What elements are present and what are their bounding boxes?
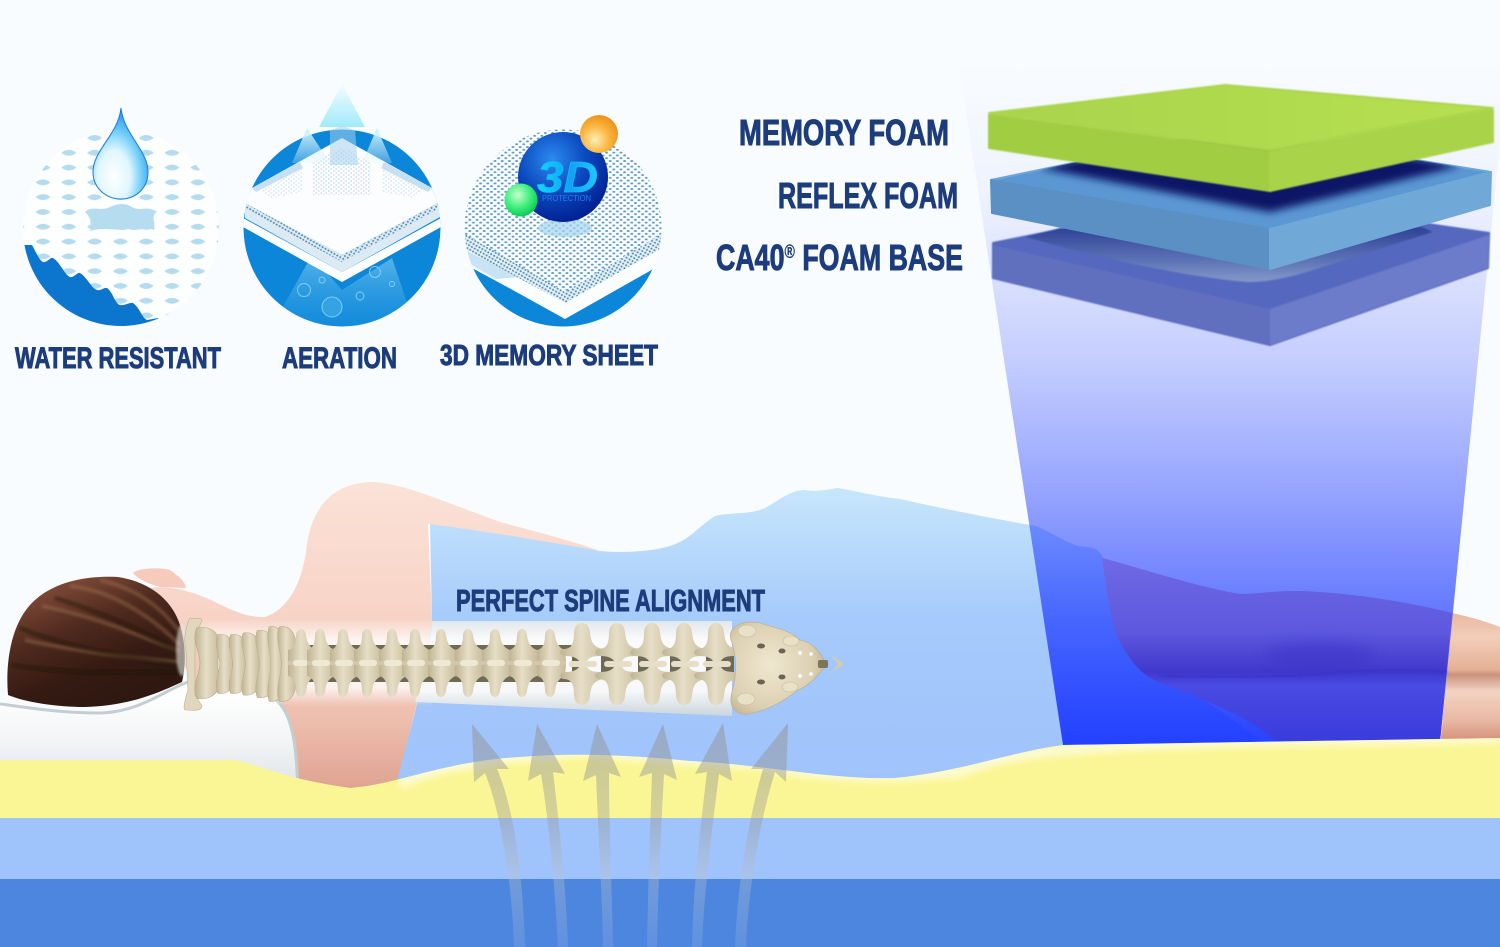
- spine: sacrum and coccyx: [730, 622, 844, 714]
- white lower band: [243, 218, 441, 282]
- foam layer: reflex: [991, 125, 1491, 269]
- foam layer: CA40 base: [993, 195, 1489, 345]
- protection lettering: PROTECTION: [542, 194, 591, 203]
- green sphere: [504, 184, 538, 216]
- arrow 6: [735, 723, 788, 947]
- layer shadow band: [1025, 227, 1433, 282]
- figure: skin torso, neck and arm: [150, 482, 600, 800]
- figure: hair: [7, 577, 188, 707]
- figure: leg skin: [1440, 613, 1500, 750]
- label: CA40 foam base: CA40: [716, 237, 808, 278]
- orange sphere: [580, 115, 618, 153]
- spine background glow: [200, 618, 732, 716]
- icon: water resistant: [20, 108, 219, 340]
- label: aeration: AERATION: [282, 342, 397, 375]
- sphere shadow: [538, 219, 592, 237]
- spine: dark canal pieces: [274, 645, 734, 682]
- blue wave: [24, 245, 158, 326]
- mattress: comfort layer (yellow): [0, 738, 1500, 818]
- arrow 1: [472, 724, 525, 947]
- sheet top: [245, 138, 438, 255]
- mattress: middle layer: [0, 818, 1500, 879]
- spine illustration: [184, 618, 844, 714]
- label: reflex foam: REFLEX FOAM: [778, 175, 958, 216]
- icon: 3D memory sheet: [464, 115, 662, 326]
- icon: aeration: [243, 84, 441, 326]
- label: CA40 foam base: FOAM BASE: [795, 237, 963, 278]
- lower light rays: [283, 255, 407, 326]
- label: perfect spine alignment: PERFECT SPINE ALIGNMENT: [456, 583, 765, 618]
- spine: thoracic vertebrae: [288, 629, 566, 697]
- label: CA40 foam base: ®: [784, 242, 795, 263]
- spine: lumbar vertebrae: [560, 623, 741, 705]
- arrow 2: [528, 724, 568, 947]
- water reflection: [85, 204, 157, 231]
- label: 3D memory sheet: 3D MEMORY SHEET: [440, 340, 658, 372]
- figure: shorts inside beam: [1102, 558, 1452, 742]
- blue 3D sphere: [518, 132, 608, 222]
- 3D lettering: 3D: [537, 153, 598, 202]
- spine: cervical vertebrae: [184, 618, 296, 710]
- layered edge: [245, 203, 440, 272]
- label: water resistant: WATER RESISTANT: [15, 342, 221, 375]
- figure: pillow: [0, 682, 298, 800]
- figure: shirt: [390, 488, 1275, 800]
- arrows: air circulation: [472, 723, 788, 947]
- arrow 5: [692, 723, 732, 947]
- figure: ear: [133, 568, 186, 588]
- label: memory foam: MEMORY FOAM: [739, 112, 949, 153]
- arrow 3: [583, 724, 621, 947]
- water drop: [93, 108, 148, 199]
- air triangles: [292, 84, 392, 165]
- mattress: base layer: [0, 879, 1500, 947]
- arrow 4: [639, 724, 677, 947]
- foam layer: memory: [989, 85, 1493, 191]
- light beam from foam layers: [955, 40, 1500, 745]
